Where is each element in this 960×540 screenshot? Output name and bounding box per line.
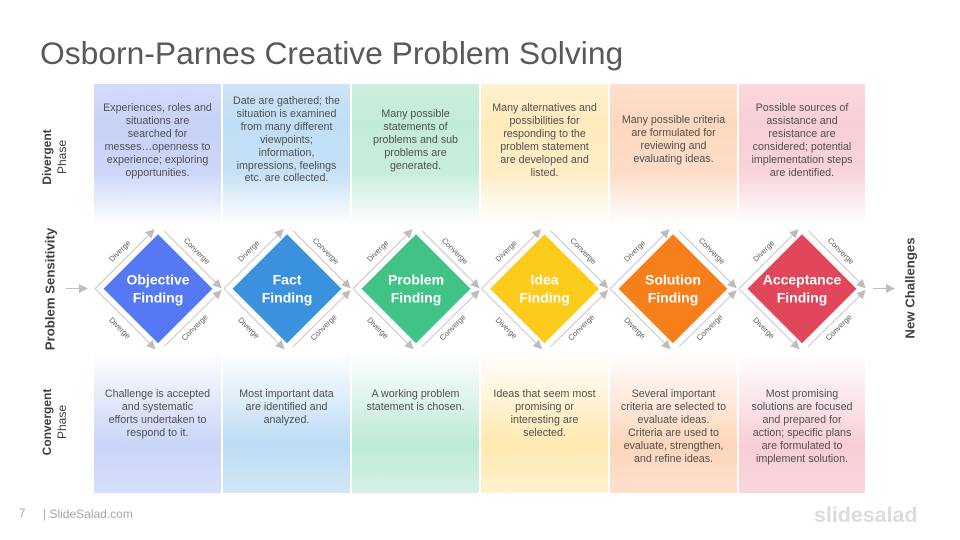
diamond [618,234,728,343]
text: fact finding convergent [239,388,334,426]
text: idea finding divergent: responding to the [503,128,586,140]
diamond label: Finding [133,290,183,306]
text: objective finding divergent: messes…openness to [105,141,210,153]
label: new challenges: New Challenges [902,237,918,339]
text: fact finding convergent: analyzed. [264,414,309,426]
diamond label: Problem [388,272,444,288]
diamond [232,234,342,343]
panel: convergent fact finding [223,351,350,493]
text: fact finding divergent: impressions, feelings [237,160,336,172]
panel: divergent objective finding [94,84,221,225]
step: idea finding [482,230,608,349]
arrow labels: Converge [440,236,470,266]
text: solution finding divergent [622,114,726,165]
panel: divergent problem finding [352,84,479,225]
text: idea finding convergent [493,388,596,439]
text: fact finding convergent: Most important data [239,388,334,400]
arrow labels: Converge [568,236,598,266]
diamond [490,234,599,343]
text: solution finding convergent: Several important [632,388,715,400]
text: problem finding divergent: problems and sub [373,134,458,146]
arrow labels: Converge [566,312,596,342]
diamond label: Finding [519,290,570,306]
arrow labels [494,236,598,342]
text: objective finding convergent: efforts undertaken to [109,414,206,426]
arrow labels [622,236,727,342]
text: fact finding divergent: viewpoints; [260,134,313,146]
diamond [104,234,212,343]
text: problem finding divergent: generated. [390,160,441,172]
text: objective finding convergent: respond to it. [127,427,188,439]
text: fact finding convergent: are identified and [246,401,328,413]
step: solution finding [610,230,736,349]
text: objective finding divergent [103,102,212,179]
arrow labels: Converge [824,312,854,342]
label: convergent phase [40,388,69,455]
arrow labels: Diverge [622,315,647,340]
text: solution finding convergent: evaluate, strengthen, [624,440,723,452]
arrow labels: Converge [180,312,210,342]
panel: convergent solution finding [610,351,737,493]
text: solution finding convergent: and refine ideas. [634,453,713,465]
text: acceptance finding divergent: assistance and [766,115,838,127]
arrow labels: Converge [311,236,341,266]
text: acceptance finding divergent: resistance are [768,128,836,140]
text: idea finding divergent [492,102,597,179]
arrow labels: Converge [182,236,212,266]
text: idea finding divergent: listed. [531,167,558,179]
text: solution finding convergent: criteria are selected to [621,401,726,413]
text: acceptance finding convergent: action; specific plans [753,427,851,439]
label: divergent phase: Phase [55,140,69,174]
text: acceptance finding divergent: are identified. [770,167,834,179]
arrow labels [751,236,856,342]
diamond label: Finding [648,290,698,306]
text: idea finding divergent: Many alternatives and [492,102,597,114]
text: solution finding divergent: evaluating ideas. [633,153,714,165]
text: idea finding convergent: Ideas that seem most [493,388,596,400]
diamond label: Finding [777,290,827,306]
title: Osborn-Parnes Creative Problem Solving [40,35,623,71]
text: idea finding divergent: are developed and [500,154,589,166]
text: problem finding divergent: Many possible [381,108,450,120]
arrow labels: Converge [697,236,727,266]
diamond label: Solution [645,272,701,288]
text: idea finding divergent: problem statement [500,141,589,153]
arrow labels: Diverge [622,238,647,263]
text: solution finding convergent: evaluate ideas. [638,414,709,426]
text: problem finding convergent: statement is chosen. [366,401,465,413]
text: acceptance finding convergent: are formulated to [762,440,842,452]
text: objective finding divergent: opportunities. [125,167,190,179]
text: acceptance finding divergent: implementation steps [752,154,852,166]
arrow: new challenges output [873,288,894,290]
text: acceptance finding divergent [752,102,852,179]
text: acceptance finding convergent: and prepared for [762,414,842,426]
arrow labels: Diverge [236,315,261,340]
arrow labels: Converge [438,312,468,342]
arrow labels: Diverge [107,238,132,263]
arrow labels: Diverge [494,238,519,263]
panel: convergent idea finding [481,351,608,493]
diamond [362,234,470,343]
arrow: problem sensitivity input [66,288,87,290]
arrow labels: Diverge [494,315,519,340]
text: acceptance finding convergent: Most promising [766,388,838,400]
arrow labels: Converge [309,312,339,342]
text: solution finding convergent [621,388,726,465]
label: divergent phase [40,129,69,185]
arrow labels: Diverge [365,315,390,340]
text: problem finding divergent: statements of [383,121,448,133]
label: divergent phase: Divergent [40,129,54,185]
text: solution finding divergent: Many possible criteria [622,114,725,126]
text: solution finding divergent: reviewing and [641,140,706,152]
text: fact finding divergent: Date are gathered; the [233,95,340,107]
arrow labels: Diverge [751,238,776,263]
panel: convergent objective finding [94,351,221,493]
text: acceptance finding divergent: considered; potential [753,141,851,153]
text: problem finding divergent [373,108,458,172]
text: idea finding convergent: selected. [523,427,566,439]
text: acceptance finding divergent: Possible sources of [756,102,848,114]
diamond label: Objective [126,272,190,288]
arrow labels: Converge [826,236,856,266]
text: acceptance finding convergent: implement solution. [756,453,848,465]
text: fact finding divergent: information, [259,147,314,159]
diamond label: Acceptance [763,272,842,288]
panel: divergent fact finding [223,84,350,225]
footer: page number: 7 [19,508,25,520]
arrow labels [365,236,470,342]
text: objective finding convergent [105,388,210,439]
step: problem finding [353,230,479,349]
text: idea finding convergent: promising or [515,401,574,413]
panel: divergent solution finding [610,84,737,225]
text: solution finding convergent: Criteria are used to [628,427,719,439]
step: acceptance finding [739,230,865,349]
arrow labels: Diverge [751,315,776,340]
text: problem finding convergent [366,388,465,413]
panel: convergent acceptance finding [739,351,865,493]
arrow labels: Diverge [365,238,390,263]
text: objective finding divergent: situations are [126,115,189,127]
arrow labels: Diverge [236,238,261,263]
text: solution finding divergent: are formulated for [631,127,716,139]
text: objective finding divergent: experience; exploring [107,154,208,166]
panel: divergent acceptance finding [739,84,865,225]
diamond label: Fact [273,272,302,288]
text: fact finding divergent [233,95,340,184]
panel: convergent problem finding [352,351,479,493]
text: idea finding convergent: interesting are [511,414,578,426]
footer: site credit: | SlideSalad.com [43,507,133,521]
text: objective finding divergent: searched for [128,128,187,140]
text: fact finding divergent: from many different [241,121,332,133]
diamond label: Idea [530,272,559,288]
label: convergent phase: Phase [55,405,69,439]
diamond [748,234,856,343]
text: idea finding divergent: possibilities for [509,115,580,127]
text: fact finding divergent: etc. are collected. [245,172,328,184]
arrow labels: Converge [695,312,725,342]
arrow labels: Diverge [107,315,132,340]
panel: divergent idea finding [481,84,608,225]
text: problem finding divergent: problems are [384,147,447,159]
text: objective finding convergent: and systematic [122,401,193,413]
text: fact finding divergent: situation is examined [237,108,336,120]
arrow labels [107,236,212,342]
arrow labels [236,236,341,342]
text: problem finding convergent: A working problem [372,388,459,400]
label: problem sensitivity: Problem Sensitivity [42,227,58,350]
text: objective finding divergent: Experiences, roles and [103,102,212,114]
step: fact finding [224,230,350,349]
footer: logo wordmark: slidesalad [814,503,917,527]
text: objective finding convergent: Challenge is accepted [105,388,210,400]
label: convergent phase: Convergent [40,389,54,455]
text: acceptance finding convergent [752,388,852,465]
text: acceptance finding convergent: solutions are focused [752,401,852,413]
diamond label: Finding [262,290,312,306]
diamond label: Finding [391,290,441,306]
step: objective finding [95,230,221,349]
